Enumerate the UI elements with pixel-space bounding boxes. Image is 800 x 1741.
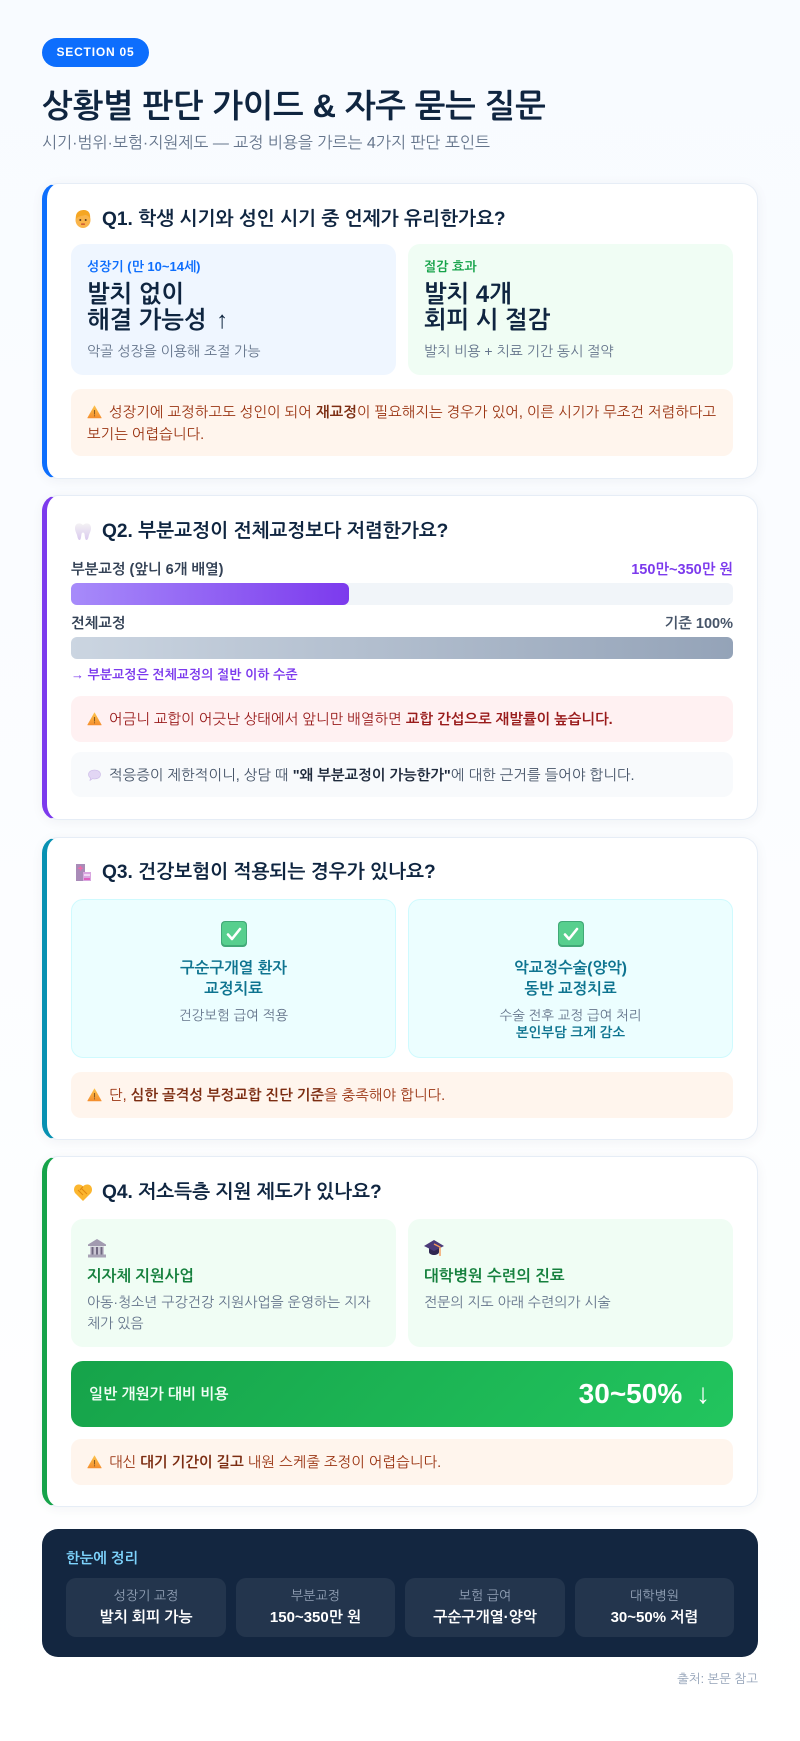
box title: 지자체 지원사업 (87, 1268, 194, 1285)
cell value: 150~350만 원 (270, 1609, 361, 1626)
cell label: 대학병원 (630, 1588, 679, 1603)
icon: check (558, 921, 584, 947)
cell label: 부분교정 (291, 1588, 340, 1603)
box title: 구순구개열 환자 (180, 960, 287, 977)
big text (87, 281, 228, 334)
value partial: 150만~350만 원 (631, 562, 733, 578)
icon: check (221, 921, 247, 947)
description (500, 1008, 641, 1040)
arrow note: → 부분교정은 전체교정의 절반 이하 수준 (71, 667, 298, 682)
heading Q4: Q4. 저소득층 지원 제도가 있나요? (102, 1182, 382, 1203)
panel: Q1 (42, 183, 758, 479)
box title: 동반 교정치료 (524, 981, 617, 998)
summary panel (42, 1529, 758, 1657)
label full: 전체교정 (71, 616, 126, 632)
description (87, 1294, 370, 1331)
cell value: 발치 회피 가능 (100, 1609, 192, 1626)
icon: institution (88, 1239, 106, 1258)
warning note (71, 1439, 733, 1485)
summary title: 한눈에 정리 (66, 1551, 138, 1567)
summary cell: growth (66, 1578, 226, 1637)
heading Q3: Q3. 건강보험이 적용되는 경우가 있나요? (102, 862, 436, 883)
big text: 해결 가능성 ↑ (87, 307, 228, 334)
description: 발치 비용 + 치료 기간 동시 절약 (424, 343, 613, 359)
advice note: 적응증이 제한적이니, 상담 때 "왜 부분교정이 가능한가"에 대한 근거를 들어야 합니다. (109, 768, 635, 784)
summary cell: insurance (405, 1578, 565, 1637)
big text: 회피 시 절감 (424, 307, 550, 334)
label partial: 부분교정 (앞니 6개 배열) (71, 562, 223, 578)
label: 절감 효과 (424, 259, 476, 274)
box title: 악교정수술(양악) (514, 960, 627, 977)
icon: graduation cap (424, 1240, 444, 1256)
warning note (71, 696, 733, 742)
description: 아동·청소년 구강건강 지원사업을 운영하는 지자 (87, 1294, 370, 1310)
section badge: SECTION 05 (56, 45, 135, 59)
cell value: 구순구개열·양악 (433, 1609, 537, 1626)
description: 건강보험 급여 적용 (179, 1008, 288, 1023)
bar fill (71, 583, 349, 605)
box: university hospital (408, 1219, 733, 1347)
warning note: 보기는 어렵습니다. (87, 427, 204, 443)
description: 체가 있음 (87, 1315, 144, 1331)
source: 출처: 본문 참고 (677, 1672, 758, 1686)
box: cleft patients (71, 899, 396, 1058)
description: 본인부담 크게 감소 (516, 1025, 625, 1040)
warning note (71, 389, 733, 456)
cell label: 성장기 교정 (114, 1588, 178, 1603)
big text: 발치 없이 (87, 281, 184, 308)
label: 성장기 (만 10~14세) (87, 259, 200, 274)
warning note: 대신 대기 기간이 길고 내원 스케줄 조정이 어렵습니다. (109, 1455, 441, 1471)
panel: Q2 (42, 495, 758, 820)
description: 전문의 지도 아래 수련의가 시술 (424, 1294, 611, 1310)
box: local government (71, 1219, 396, 1347)
panel: Q4 (42, 1156, 758, 1507)
panel: Q3 (42, 837, 758, 1140)
box title: 대학병원 수련의 진료 (424, 1268, 565, 1285)
warning note: 단, 심한 골격성 부정교합 진단 기준을 충족해야 합니다. (109, 1088, 445, 1104)
savings banner (71, 1361, 733, 1427)
banner label: 일반 개원가 대비 비용 (89, 1386, 228, 1403)
section badge (42, 38, 149, 67)
bar partial (71, 583, 733, 605)
big text: 발치 4개 (424, 281, 512, 308)
title: 상황별 판단 가이드 & 자주 묻는 질문 (42, 88, 546, 124)
box title (514, 960, 627, 998)
warning note: 성장기에 교정하고도 성인이 되어 재교정이 필요해지는 경우가 있어, 이른 시기가 무조건 저렴하다고 (109, 405, 716, 421)
big text (424, 281, 550, 334)
box: orthognathic surgery (408, 899, 733, 1058)
warning note: 어금니 교합이 어긋난 상태에서 앞니만 배열하면 교합 간섭으로 재발률이 높습니다. (109, 712, 613, 728)
heading Q2: Q2. 부분교정이 전체교정보다 저렴한가요? (102, 521, 448, 542)
warning note (71, 1072, 733, 1118)
cell label: 보험 급여 (459, 1588, 511, 1603)
summary cell: partial (236, 1578, 395, 1637)
cell value: 30~50% 저렴 (611, 1609, 698, 1626)
banner value: 30~50% ↓ (579, 1378, 710, 1409)
advice note (71, 752, 733, 797)
summary cell: university hospital (575, 1578, 734, 1637)
bar full (71, 637, 733, 659)
box title: 교정치료 (204, 981, 263, 998)
box: growth period (71, 244, 396, 375)
subtitle: 시기·범위·보험·지원제도 — 교정 비용을 가르는 4가지 판단 포인트 (42, 135, 490, 152)
description: 수술 전후 교정 급여 처리 (500, 1008, 641, 1023)
box: savings (408, 244, 733, 375)
value full: 기준 100% (665, 616, 733, 632)
heading Q1: Q1. 학생 시기와 성인 시기 중 언제가 유리한가요? (102, 209, 506, 230)
box title (180, 960, 287, 998)
description: 악골 성장을 이용해 조절 가능 (87, 343, 260, 359)
